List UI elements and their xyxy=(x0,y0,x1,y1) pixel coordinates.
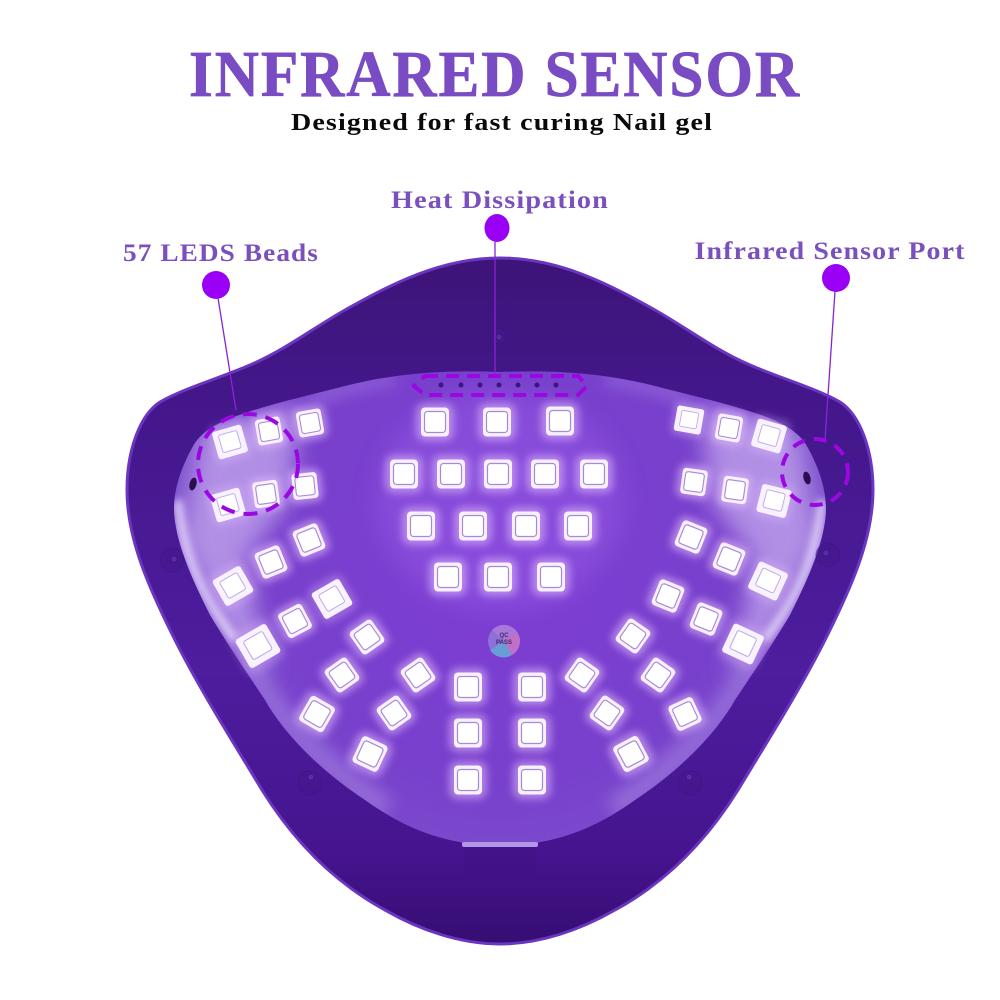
LED beads: centre top xyxy=(385,402,613,596)
sticker xyxy=(488,625,520,657)
sticker: PASS xyxy=(496,640,512,646)
bright side reflections xyxy=(180,405,300,680)
title: INFRARED SENSOR xyxy=(189,38,801,111)
callout: Heat Dissipation xyxy=(391,187,609,395)
callout: Infrared Sensor Port: Infrared Sensor Port xyxy=(694,238,966,265)
LED beads: left wing xyxy=(204,403,443,779)
screw holes xyxy=(160,328,840,795)
callout: Heat Dissipation: Heat Dissipation xyxy=(391,187,609,214)
callout: 57 LEDS Beads xyxy=(123,240,319,514)
LED beads: right wing xyxy=(557,400,797,780)
subtitle: Designed for fast curing Nail gel xyxy=(291,109,713,136)
callout: 57 LEDS Beads: 57 LEDS Beads xyxy=(123,240,319,267)
sticker: QC xyxy=(500,633,509,639)
sensor ports xyxy=(188,477,198,491)
LED beads: bottom centre xyxy=(449,668,551,799)
lamp body xyxy=(127,258,873,944)
bottom latch xyxy=(462,842,538,875)
callout: Infrared Sensor Port xyxy=(694,238,966,505)
lamp xyxy=(127,258,873,944)
heat vents xyxy=(438,382,558,388)
inner reflector xyxy=(160,360,840,860)
